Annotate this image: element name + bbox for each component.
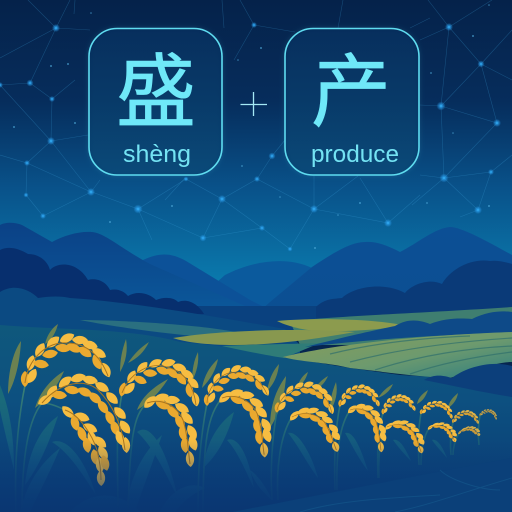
- rice panicle 8: [274, 376, 339, 421]
- dark hill right: [424, 364, 512, 397]
- ground slope: [0, 325, 512, 512]
- field: big right terraced field: [283, 332, 512, 378]
- rice panicle 6: [202, 362, 271, 406]
- card: shèng: [89, 28, 222, 175]
- field: upper yellow: [277, 319, 402, 331]
- rice panicle 5: [141, 391, 200, 467]
- rice panicle 9: [286, 400, 345, 461]
- character: 产: 产: [311, 48, 391, 137]
- character: 盛: 盛: [116, 48, 196, 137]
- olive leaf tips: [8, 324, 458, 428]
- pinyin label: shèng: [123, 141, 191, 168]
- rice panicle 2: [36, 372, 133, 453]
- lake: [170, 306, 512, 332]
- field: teal strip: [222, 343, 320, 358]
- rice panicle 3: [59, 403, 111, 486]
- rice panicle 13: [382, 415, 428, 459]
- rice panicle 4: [118, 347, 210, 416]
- rice panicle 14: [419, 396, 457, 422]
- rice panicle 12: [381, 393, 416, 415]
- foreground path band: [232, 458, 512, 512]
- rice panicle 15: [425, 418, 460, 449]
- rice panicle 18: [479, 406, 500, 422]
- stems: [15, 385, 480, 512]
- tree line: left: [0, 248, 204, 316]
- constellation network: [0, 0, 512, 249]
- plus sign: [240, 92, 267, 116]
- foreground shade: [0, 440, 512, 512]
- lower leaf blades: [0, 385, 447, 512]
- low left hills: [0, 288, 300, 370]
- upper right field: [290, 307, 512, 345]
- meaning label: produce: [311, 141, 399, 168]
- stars: [13, 4, 490, 249]
- rice panicle 16: [452, 407, 481, 427]
- network nodes: [0, 22, 501, 252]
- field: middle yellow: [173, 330, 355, 345]
- background: night sky: [0, 0, 512, 290]
- rice panicle 17: [456, 421, 483, 445]
- field strip: left teal: [80, 320, 245, 338]
- rice panicle 11: [346, 402, 388, 452]
- rice panicle 10: [338, 381, 383, 411]
- rice panicle 7: [217, 387, 274, 458]
- tree line: right: [316, 261, 512, 322]
- foreground rice plants: [0, 324, 500, 512]
- distant hills over fields: [305, 311, 512, 347]
- rice panicle 1: [21, 331, 113, 387]
- mountains: far range: [0, 223, 512, 320]
- card: produce: [285, 28, 419, 175]
